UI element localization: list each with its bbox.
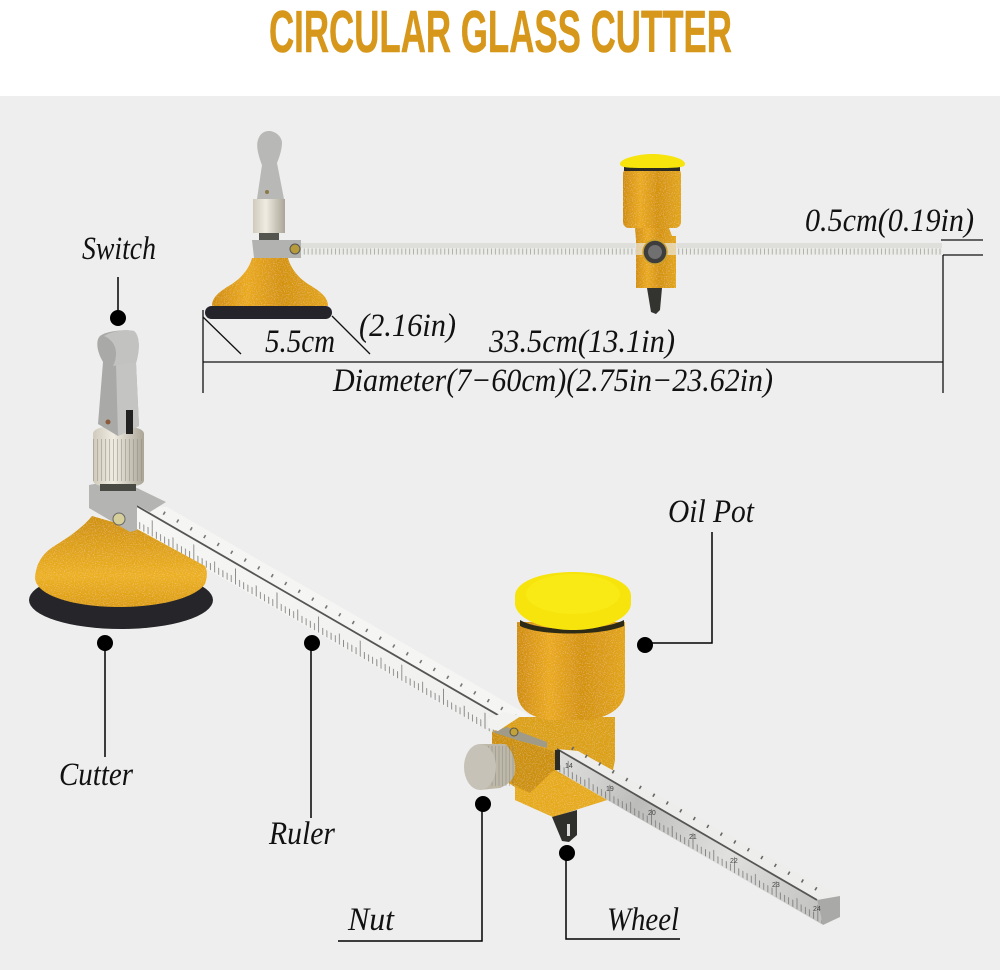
knurled nut [93, 426, 144, 487]
gold dome [35, 516, 207, 607]
callout: nut [338, 796, 491, 941]
small oil pot [620, 154, 685, 314]
left ruler tip at clamp [488, 712, 521, 731]
label: base cm: 5.5cm [265, 324, 335, 360]
callout: oil pot [637, 494, 755, 653]
callout: nut: Nut [347, 902, 395, 938]
dimension lines [203, 240, 983, 393]
wheel blade [552, 810, 577, 842]
rubber ring [29, 571, 213, 629]
ruler numbers: 19 [606, 786, 614, 793]
callout: switch [82, 231, 156, 326]
yellow cap [515, 572, 631, 630]
clamp lower block [515, 771, 607, 817]
dimension labels [265, 203, 974, 399]
ruler numbers [565, 763, 821, 913]
callout: cutter: Cutter [59, 757, 133, 793]
small suction base [205, 258, 332, 319]
ruler numbers: 20 [648, 810, 656, 817]
callout: wheel: Wheel [607, 902, 679, 938]
callout: ruler: Ruler [268, 816, 335, 852]
ruler numbers: 14 [565, 763, 573, 770]
small side-view cutter photo [205, 131, 942, 319]
ruler numbers: 22 [730, 858, 738, 865]
label: top thickness: 0.5cm(0.19in) [805, 203, 974, 239]
label: base inches: (2.16in) [359, 308, 456, 344]
callout: wheel [559, 845, 680, 939]
large ruler, left section [135, 505, 530, 744]
large oil pot assembly [464, 572, 631, 842]
slot plate [492, 727, 547, 748]
small handle and knurl [252, 131, 301, 258]
label: ruler length: 33.5cm(13.1in) [488, 324, 675, 360]
clamp left plate [492, 732, 555, 793]
clamp block [492, 717, 615, 817]
ruler numbers: 23 [772, 882, 780, 889]
callout: ruler [268, 635, 335, 852]
callout: switch: Switch [82, 231, 156, 267]
large ruler, right section [555, 748, 840, 925]
switch handle [97, 330, 139, 436]
callout: oil pot: Oil Pot [668, 494, 755, 530]
label: diameter range: Diameter(7−60cm)(2.75in−23.62in) [332, 363, 773, 399]
small ruler [296, 243, 942, 255]
pot ring [520, 620, 624, 634]
callout: cutter [59, 635, 133, 793]
bracket [89, 483, 166, 532]
knob [480, 744, 515, 790]
ruler numbers: 21 [689, 834, 697, 841]
ruler numbers: 24 [813, 906, 821, 913]
pot body [517, 622, 625, 720]
large suction base cutter [29, 330, 213, 629]
